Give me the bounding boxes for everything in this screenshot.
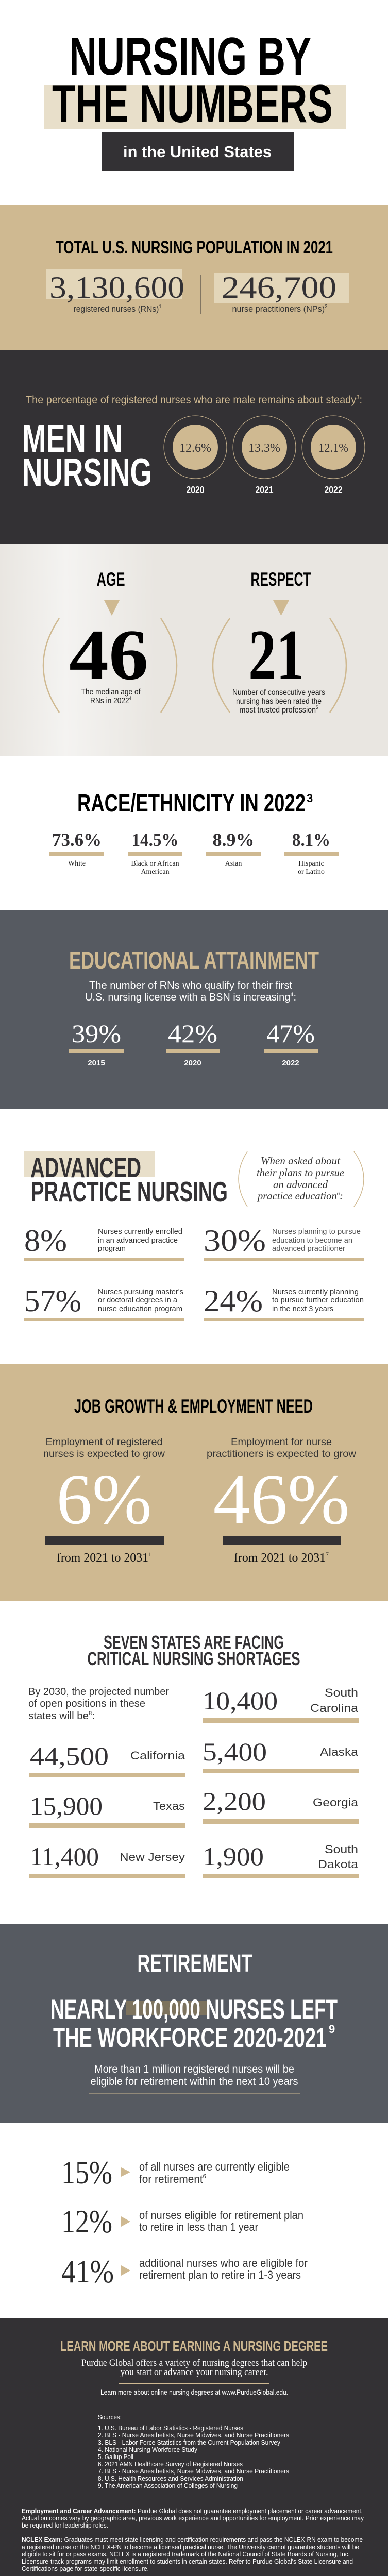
panel: educational attainment: 2022 — [282, 1059, 299, 1067]
title — [44, 27, 346, 134]
panel: state shortages: CRITICAL NURSING SHORTAGES — [88, 1648, 300, 1669]
panel: total population: registered nurses (RNs) — [73, 304, 166, 314]
panel: race/ethnicity: American — [141, 868, 170, 876]
panel: educational attainment: The number of RNs who qualify for their first — [89, 980, 292, 991]
panel: advanced practice nursing: When asked about — [261, 1155, 341, 1167]
panel: retirement: 9 — [329, 2023, 335, 2036]
panel: educational attainment: : — [293, 992, 296, 1003]
panel: learn more footer: Learn more about online nursing degrees at www.PurdueGlobal.edu. — [100, 2388, 288, 2396]
panel: learn more footer: Sources: — [98, 2413, 122, 2421]
panel: retirement: eligible for retirement within the next 10 years — [91, 2076, 298, 2088]
panel: race/ethnicity: Black or African — [131, 860, 179, 868]
panel: state shortages: South — [325, 1843, 358, 1856]
panel: educational attainment: 47% — [266, 1019, 315, 1048]
panel: retirement: RETIREMENT — [137, 1950, 252, 1977]
panel: retirement: More than 1 million registered nurses will be — [94, 2063, 294, 2075]
panel: advanced practice nursing: 30% — [204, 1224, 266, 1258]
panel: state shortages: 2,200 — [203, 1787, 266, 1816]
panel: advanced practice nursing: nurse education program — [98, 1304, 182, 1313]
panel: state shortages: 44,500 — [30, 1741, 109, 1770]
panel: total population — [0, 205, 388, 350]
panel: advanced practice nursing: PRACTICE NURSING — [31, 1176, 228, 1208]
panel: learn more footer: 4. National Nursing Workforce Study — [98, 2446, 197, 2453]
panel: state shortages: 15,900 — [30, 1791, 103, 1820]
panel: age and respect — [0, 544, 388, 756]
panel: state shortages: Dakota — [318, 1858, 359, 1871]
panel: retirement stats: 41% — [61, 2253, 114, 2290]
panel: advanced practice nursing: education to become an — [272, 1236, 352, 1245]
panel: job growth: nurses is expected to grow — [43, 1449, 165, 1460]
panel: advanced practice nursing: their plans to pursue — [257, 1166, 344, 1179]
panel: men in nursing: 2022 — [325, 485, 342, 495]
panel: total population: 246,700 — [222, 270, 336, 304]
panel: age and respect: 4 — [129, 696, 131, 701]
panel: race/ethnicity — [49, 790, 339, 876]
panel: job growth: 6% — [57, 1460, 151, 1539]
panel: advanced practice nursing: 8% — [24, 1224, 67, 1258]
panel: race/ethnicity: 8.1% — [292, 829, 330, 850]
panel: race/ethnicity: RACE/ETHNICITY IN 2022 — [77, 790, 306, 817]
panel: race/ethnicity: Asian — [225, 860, 242, 868]
panel: learn more footer — [0, 2318, 388, 2576]
panel: state shortages: : — [92, 1710, 95, 1722]
panel: age and respect: 5 — [316, 705, 318, 710]
panel: retirement stats: 15% — [61, 2154, 112, 2191]
panel: state shortages: California — [130, 1749, 185, 1762]
panel: men in nursing: 12.1% — [318, 442, 348, 455]
panel: total population: nurse practitioners (NPs) — [232, 304, 329, 314]
panel: total population: 2 — [325, 304, 328, 310]
panel: state shortages: Texas — [153, 1800, 185, 1812]
panel: job growth: 46% — [213, 1460, 349, 1539]
panel: job growth: from 2021 to 2031 — [234, 1551, 326, 1565]
panel: state shortages: By 2030, the projected number — [28, 1686, 169, 1698]
panel: state shortages: South — [325, 1686, 358, 1699]
panel: state shortages: SEVEN STATES ARE FACING — [104, 1632, 284, 1653]
panel: retirement stats: for retirement — [139, 2173, 207, 2185]
panel: retirement — [0, 1924, 388, 2123]
panel: advanced practice nursing: or doctoral degrees in a — [98, 1296, 178, 1304]
panel: state shortages: New Jersey — [120, 1851, 185, 1863]
panel: learn more footer: Actual outcomes vary by geographic area, previous work experience and opportunities for employment. Prior experience may — [22, 2514, 364, 2522]
panel: age and respect: 46 — [69, 615, 148, 695]
panel: learn more footer: NCLEX Exam: Graduates must meet state licensing and certification requirements and pass the NCLEX-RN exam to become — [22, 2536, 363, 2544]
panel: advanced practice nursing: to pursue further education — [272, 1296, 364, 1304]
panel: educational attainment: 42% — [168, 1019, 217, 1048]
panel: learn more footer: 1. U.S. Bureau of Labor Statistics - Registered Nurses — [98, 2424, 243, 2432]
panel: educational attainment: 4 — [290, 992, 293, 998]
panel: learn more footer: 8. U.S. Health Resources and Services Administration — [98, 2475, 243, 2482]
panel: total population: 1 — [159, 304, 162, 310]
panel: men in nursing: 3 — [356, 394, 360, 401]
panel: race/ethnicity: Hispanic — [298, 860, 324, 868]
panel: race/ethnicity: 73.6% — [52, 829, 102, 850]
panel: men in nursing: 2021 — [256, 485, 273, 495]
panel: job growth: practitioners is expected to grow — [207, 1449, 356, 1460]
panel: job growth: 7 — [326, 1551, 329, 1558]
panel: state shortages: 8 — [89, 1710, 92, 1717]
panel: learn more footer: 2. BLS - Nurse Anesthetists, Nurse Midwives, and Nurse Practitioners — [98, 2431, 289, 2439]
panel: retirement stats: 6 — [203, 2173, 206, 2180]
panel: race/ethnicity: White — [68, 860, 86, 868]
panel: job growth: Employment for nurse — [231, 1437, 332, 1448]
panel: learn more footer: Employment and Career Advancement: Purdue Global does not guarantee employment placement or career advancement. — [22, 2507, 363, 2515]
panel: educational attainment: 2015 — [88, 1059, 105, 1067]
panel: advanced practice nursing: 6 — [337, 1191, 340, 1197]
panel: advanced practice nursing: practice education — [258, 1190, 339, 1202]
subtitle box — [102, 132, 294, 171]
panel: advanced practice nursing: advanced practitioner — [272, 1244, 345, 1253]
panel: state shortages — [28, 1632, 359, 1878]
panel: age and respect: AGE — [97, 569, 125, 590]
panel: advanced practice nursing: 24% — [204, 1284, 263, 1318]
panel: learn more footer: 6. 2021 AMN Healthcare Survey of Registered Nurses — [98, 2460, 243, 2468]
panel: men in nursing: 12.6% — [179, 442, 211, 455]
panel: age and respect: most trusted profession — [239, 706, 325, 715]
panel: state shortages: Georgia — [313, 1796, 359, 1809]
panel: state shortages: 10,400 — [203, 1686, 278, 1715]
panel: state shortages: 1,900 — [203, 1842, 264, 1871]
panel: learn more footer: you start or advance your nursing career. — [121, 2367, 268, 2378]
panel: age and respect: nursing has been rated the — [236, 697, 322, 706]
panel: learn more footer: 5. Gallup Poll — [98, 2453, 133, 2461]
panel: retirement stats: 12% — [61, 2203, 112, 2240]
panel: men in nursing: The percentage of registered nurses who are male remains about steady — [26, 394, 375, 406]
panel: men in nursing — [0, 350, 388, 544]
panel: advanced practice nursing: Nurses planning to pursue — [272, 1227, 361, 1236]
panel: advanced practice nursing: in the next 3 years — [272, 1304, 333, 1313]
panel: retirement stats: of all nurses are currently eligible — [139, 2160, 290, 2173]
panel: advanced practice nursing: Nurses currently enrolled — [98, 1227, 182, 1236]
panel: men in nursing: NURSING — [22, 451, 152, 495]
panel: state shortages: 5,400 — [203, 1737, 267, 1766]
panel: job growth — [0, 1364, 388, 1601]
panel: learn more footer: 9. The American Association of Colleges of Nursing — [98, 2482, 238, 2489]
panel: learn more footer: be required for leadership roles. — [22, 2521, 108, 2529]
panel: educational attainment: 39% — [72, 1019, 121, 1048]
panel: advanced practice nursing: 57% — [24, 1284, 81, 1318]
panel: race/ethnicity: or Latino — [298, 868, 325, 876]
panel: educational attainment — [0, 910, 388, 1109]
panel: learn more footer: Licensure-track programs may limit enrollment to students in certain states. Refer to Purdue Global's State Licensure and — [22, 2557, 353, 2565]
panel: job growth: from 2021 to 2031 — [57, 1551, 149, 1565]
panel: age and respect: RNs in 2022 — [90, 697, 136, 705]
panel: advanced practice nursing: in an advanced practice — [98, 1236, 178, 1245]
subtitle box: in the United States — [123, 143, 272, 161]
panel: retirement stats: to retire in less than 1 year — [139, 2221, 258, 2233]
panel: age and respect: The median age of — [81, 688, 141, 697]
panel: state shortages: Alaska — [320, 1745, 359, 1758]
panel: retirement stats: additional nurses who are eligible for — [139, 2257, 308, 2269]
panel: educational attainment: U.S. nursing license with a BSN is increasing — [85, 992, 291, 1003]
panel: retirement stats: of nurses eligible for retirement plan — [139, 2209, 303, 2222]
panel: advanced practice nursing: program — [98, 1244, 126, 1253]
panel: race/ethnicity: 3 — [307, 792, 313, 805]
panel: total population: 3,130,600 — [49, 270, 184, 304]
panel: job growth: 1 — [148, 1551, 151, 1558]
panel: retirement stats: retirement plan to retire in 1-3 years — [139, 2268, 301, 2281]
panel: learn more footer: eligible to sit for or pass exams. NCLEX is a registered trademark of the National Council of State Boards of Nursing, Inc. — [22, 2550, 350, 2558]
panel: learn more footer: 7. BLS - Nurse Anesthetists, Nurse Midwives, and Nurse Practitioners — [98, 2467, 289, 2475]
panel: learn more footer: a registered nurse or the NCLEX-PN to become a licensed practical nurse. The University cannot guarantee students will be — [22, 2543, 359, 2551]
panel: retirement stats — [61, 2154, 308, 2290]
panel: age and respect: 21 — [248, 615, 304, 695]
panel: advanced practice nursing: ADVANCED — [30, 1151, 141, 1183]
panel: state shortages: states will be — [28, 1710, 88, 1722]
panel: learn more footer: Certifications page for state-specific licensure. — [22, 2565, 149, 2572]
panel: men in nursing: 2020 — [187, 485, 204, 495]
panel: advanced practice nursing: an advanced — [273, 1178, 328, 1191]
panel: learn more footer: Purdue Global offers a variety of nursing degrees that can help — [81, 2358, 307, 2368]
panel: men in nursing: MEN IN — [22, 417, 123, 461]
panel: race/ethnicity: 8.9% — [212, 829, 255, 850]
panel: age and respect: RESPECT — [250, 569, 311, 590]
panel: advanced practice nursing: : — [340, 1190, 343, 1202]
panel: men in nursing: 13.3% — [248, 442, 280, 455]
panel: state shortages: Carolina — [310, 1702, 359, 1715]
panel: men in nursing: : — [359, 394, 362, 406]
panel: learn more footer: 3. BLS - Labor Force Statistics from the Current Population Survey — [98, 2438, 280, 2446]
panel: state shortages: of open positions in these — [28, 1698, 145, 1709]
panel: advanced practice nursing: Nurses currently planning — [272, 1287, 359, 1296]
panel: job growth: Employment of registered — [45, 1437, 163, 1448]
panel: state shortages: 11,400 — [30, 1842, 99, 1871]
panel: advanced practice nursing: Nurses pursuing master's — [98, 1287, 183, 1296]
panel: age and respect: Number of consecutive years — [232, 688, 325, 697]
panel: race/ethnicity: 14.5% — [132, 829, 178, 850]
panel: educational attainment: 2020 — [184, 1059, 201, 1067]
panel: advanced practice nursing — [24, 1151, 364, 1321]
